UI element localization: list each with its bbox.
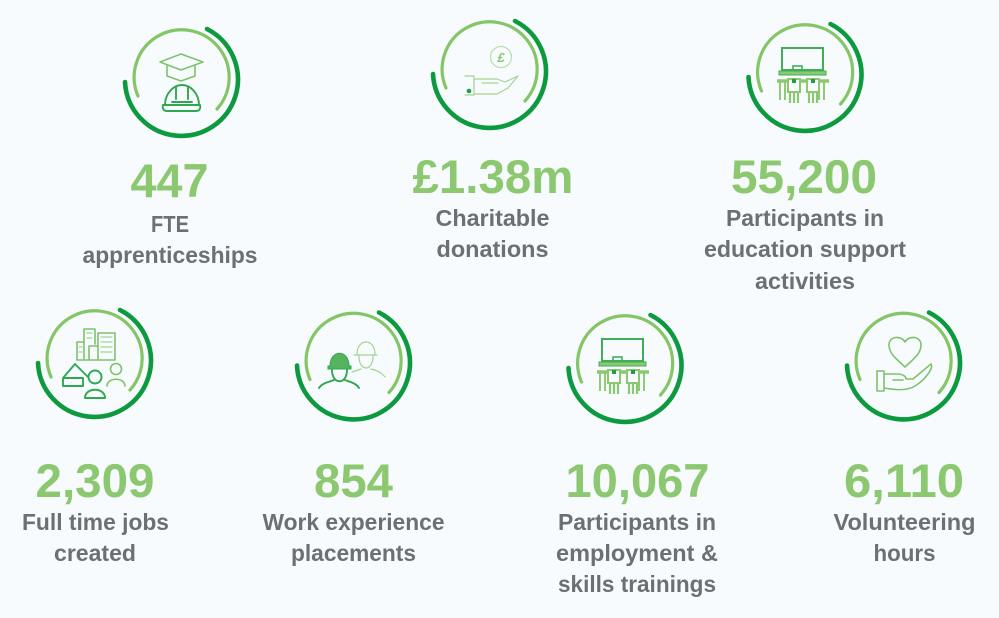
label: FTE apprenticeships: apprenticeships: [82, 242, 258, 268]
label: Work experience placements: placements: [291, 540, 416, 566]
label: Participants in education support activities: education support: [704, 236, 906, 262]
metric: work experience: [262, 312, 444, 566]
label: FTE apprenticeships: FTE: [151, 211, 189, 237]
label: Volunteering hours: hours: [874, 540, 936, 566]
number: 10,067: 10,067: [566, 454, 710, 507]
label: Work experience placements: Work experience: [262, 509, 444, 535]
metric: education support: [704, 24, 906, 294]
ring and icon: hand holding heart: [847, 312, 960, 419]
label: Charitable donations: donations: [436, 236, 548, 262]
metric: full time jobs: [22, 310, 169, 566]
metric: employment and skills training: [556, 315, 718, 597]
label: Charitable donations: Charitable: [436, 205, 550, 231]
ring and icon: classroom: [748, 24, 861, 131]
label: Participants in education support activities: Participants in: [726, 205, 884, 231]
metric: volunteering: [834, 312, 976, 566]
ring and icon: hand with pound coin: [433, 21, 546, 128]
ring and icon: hand with pound coin: £: [496, 50, 505, 65]
number: 447: 447: [130, 154, 208, 207]
ring and icon: graduate hard hat: [125, 29, 238, 136]
number: 55,200: 55,200: [731, 150, 877, 203]
label: Participants in employment and skills trainings: skills trainings: [558, 571, 716, 597]
ring and icon: classroom: [568, 315, 681, 422]
label: Full time jobs created: created: [54, 540, 136, 566]
number: £1.38m: £1.38m: [412, 150, 574, 203]
ring and icon: two workers in hard hats: [297, 312, 410, 419]
label: Full time jobs created: Full time jobs: [22, 509, 169, 535]
label: Participants in employment and skills trainings: employment &: [556, 540, 718, 566]
number: 6,110: 6,110: [844, 454, 964, 507]
label: Participants in education support activities: activities: [755, 268, 855, 294]
metric: apprenticeships: [82, 29, 258, 268]
number: 2,309: 2,309: [36, 454, 154, 507]
label: Participants in employment and skills trainings: Participants in: [558, 509, 716, 535]
label: Volunteering hours: Volunteering: [834, 509, 976, 535]
ring and icon: buildings and workers: [38, 310, 151, 417]
metric: charitable donations: [412, 21, 574, 262]
number: 854: 854: [314, 454, 393, 507]
